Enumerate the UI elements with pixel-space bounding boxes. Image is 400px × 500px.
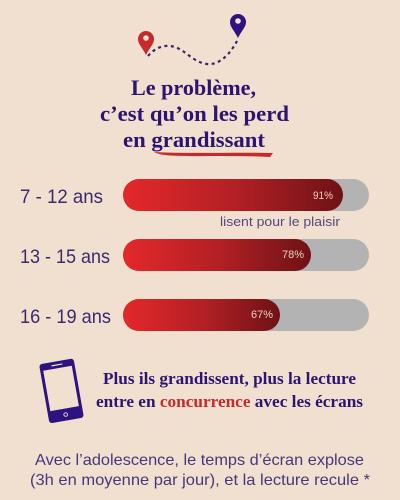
bar row: 13 - 15 ans: 13 - 15 ans: [20, 246, 110, 268]
bar row: 7 - 12 ans: [20, 179, 369, 211]
caption: lisent pour le plaisir: lisent pour le plaisir: [220, 214, 341, 229]
callout text: Plus ils grandissent, plus la lecture: [103, 369, 356, 388]
bar row: 7 - 12 ans: 7 - 12 ans: [20, 186, 103, 208]
callout text: [96, 369, 363, 411]
title: Le problème,: [131, 75, 256, 100]
bar row: 16 - 19 ans: [20, 299, 369, 331]
callout text: entre en concurrence avec les écrans: [96, 392, 363, 411]
bar row: 7 - 12 ans: 91%: [313, 190, 333, 202]
bar row: 13 - 15 ans: 78%: [282, 249, 304, 261]
footer text: Avec l’adolescence, le temps d’écran explose: [35, 452, 364, 469]
title: [100, 75, 289, 152]
bar row: 13 - 15 ans: [20, 239, 369, 271]
footer text: [30, 452, 370, 489]
bar row: 16 - 19 ans: 16 - 19 ans: [20, 306, 111, 328]
icon: route with map pins: [138, 14, 246, 64]
bar row: 16 - 19 ans: 67%: [251, 309, 273, 321]
title: c’est qu’on les perd: [100, 101, 289, 126]
icon: smartphone: [39, 358, 84, 423]
title: en grandissant: [123, 127, 265, 152]
title underline: [154, 152, 273, 157]
footer text: (3h en moyenne par jour), et la lecture recule *: [30, 472, 370, 489]
